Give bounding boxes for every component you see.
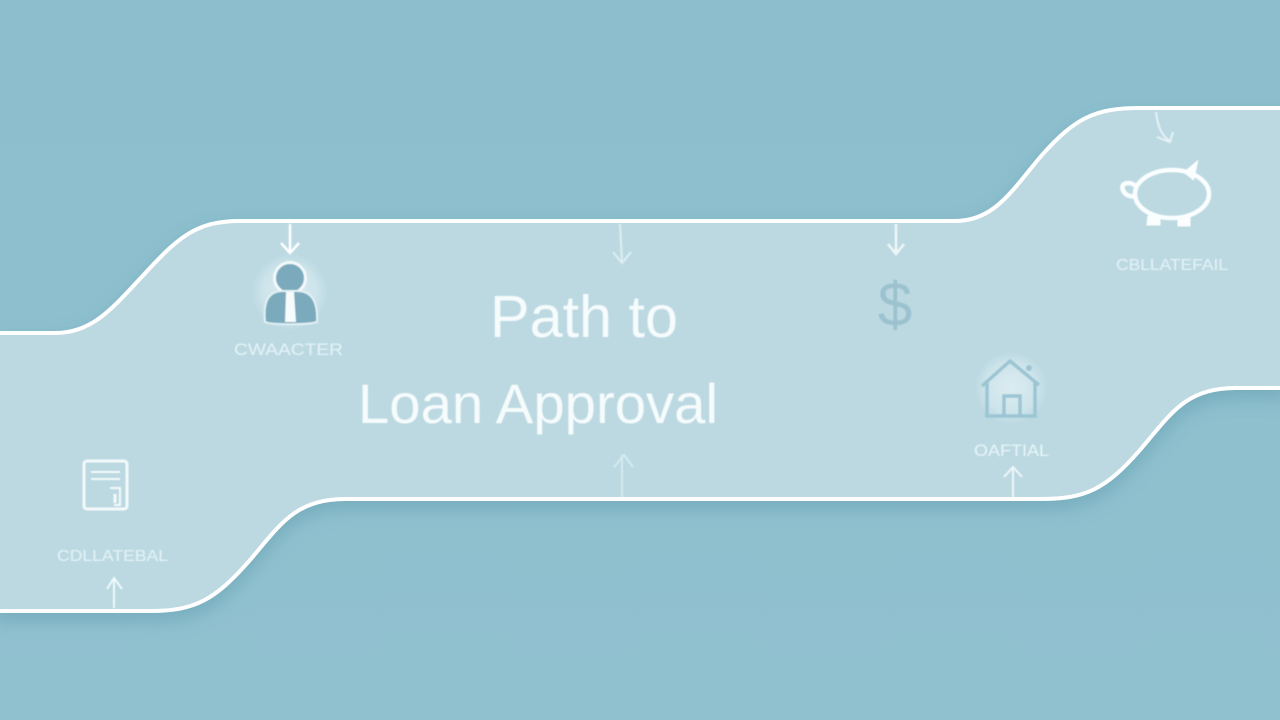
label: character: CWAACTER: [234, 340, 343, 359]
title: [358, 284, 718, 435]
arrow: up to collateral: [107, 578, 122, 608]
arrow: down to dollar: [888, 224, 904, 254]
winding path band: [0, 108, 1280, 611]
step: capacity dollar: [878, 224, 912, 340]
step: collateral document: [57, 461, 168, 608]
arrow: curved down to piggy bank: [1156, 112, 1173, 142]
arrow: up to capital: [1004, 467, 1022, 497]
icon: house: [975, 352, 1047, 424]
step: capital house: [974, 352, 1049, 497]
title: Path to: [490, 284, 678, 350]
icon: dollar sign: $: [878, 271, 912, 340]
arrow: bottom centre: [614, 455, 633, 497]
label: collateral left: CDLLATEBAL: [57, 548, 168, 565]
icon: person: [252, 254, 328, 330]
icon: piggy bank: [1122, 162, 1209, 226]
label: collateral right: CBLLATEFAIL: [1116, 257, 1228, 274]
title: Loan Approval: [358, 372, 718, 435]
step: collateral piggy bank: [1116, 112, 1228, 274]
step: character: [234, 224, 343, 359]
icon: document: [84, 461, 127, 509]
arrow: down to character: [281, 224, 299, 253]
label: capital: OAFTIAL: [974, 442, 1049, 460]
arrow: top centre: [613, 224, 631, 263]
